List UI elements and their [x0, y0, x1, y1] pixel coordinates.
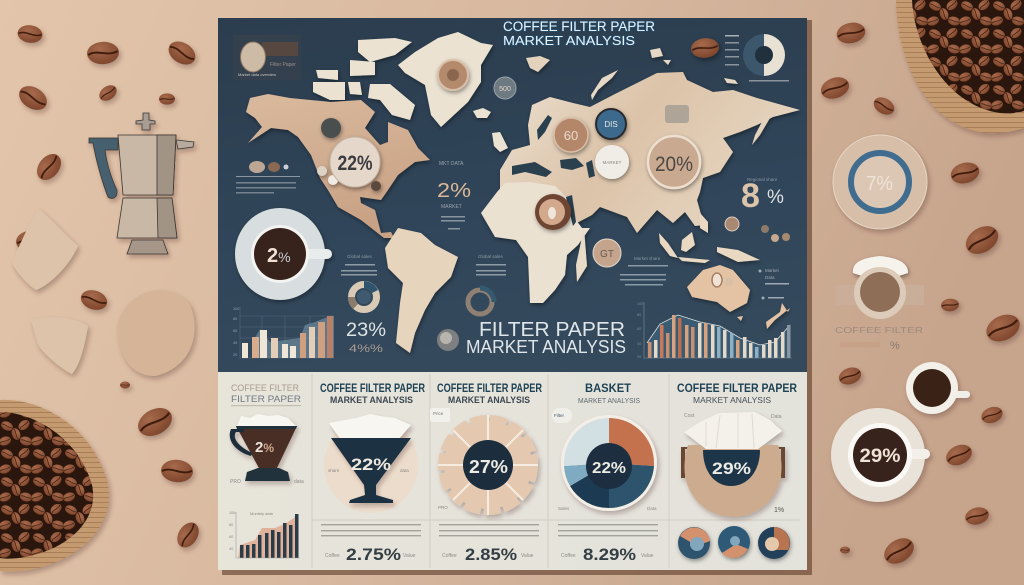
text: 29% — [860, 446, 901, 467]
bar chart: lower left — [233, 306, 334, 358]
bar chart — [229, 511, 300, 558]
Arctic islands — [313, 38, 415, 120]
indian ocean text — [620, 256, 668, 286]
column 5: coffee filter paper: Data — [771, 414, 782, 420]
marker: greenland — [438, 60, 468, 90]
marker: europe 60 — [554, 118, 588, 152]
marker: indian ocean — [593, 239, 621, 267]
panel drop shadow — [222, 20, 812, 575]
column 4: basket: MARKET ANALYSIS — [578, 396, 640, 405]
map panel — [218, 18, 807, 372]
cup with 2%: 2% — [267, 245, 291, 267]
note text: south america: Global sales — [478, 254, 504, 259]
marker: asia 20%: 20% — [655, 153, 693, 176]
column 4: basket: Filter — [554, 413, 565, 418]
column 2: coffee filter paper — [320, 381, 425, 564]
bar chart: 100 — [229, 511, 235, 515]
plate with 7% badge — [833, 135, 927, 229]
column 4: basket: 22% — [592, 460, 626, 477]
stat: 23% — [346, 320, 386, 355]
column 4: basket: Data — [647, 506, 657, 511]
paper stones left — [12, 209, 195, 376]
marker: north america 22% — [317, 118, 381, 191]
stat: 8%: 8 — [741, 177, 760, 215]
filter cup icon right — [836, 256, 924, 319]
Iceland — [473, 108, 491, 118]
right side icons and notes: Data — [765, 275, 775, 280]
note text: south america — [341, 254, 506, 276]
bar chart: lower right: 20 — [637, 355, 641, 359]
right side icons and notes: Market — [765, 268, 780, 273]
column 5: coffee filter paper: MARKET ANALYSIS — [693, 395, 771, 405]
indian ocean text: Market share — [634, 256, 661, 261]
Greenland — [398, 32, 493, 127]
column 3: coffee filter paper — [430, 381, 542, 564]
column 2: coffee filter paper: 2.75% — [346, 545, 401, 564]
stat: 2% middle: MARKET — [441, 204, 462, 210]
bar chart: Monthly data — [250, 511, 274, 516]
australia marker — [712, 273, 733, 287]
title: COFFEE FILTER PAPER — [503, 19, 655, 34]
column 3: coffee filter paper: 27% — [469, 457, 508, 477]
bar chart: lower left: 40 — [233, 341, 237, 345]
title — [503, 19, 655, 48]
marker: north america 22%: 22% — [338, 152, 373, 175]
column 1: coffee filter paper: COFFEE FILTER — [231, 383, 299, 393]
small coffee cup right — [906, 362, 970, 414]
column 1: coffee filter paper: FILTER PAPER — [231, 394, 302, 404]
column 4: basket: 8.29% — [583, 545, 636, 564]
marker: atlantic: 500 — [499, 86, 511, 93]
stat: 23%: 23% — [346, 320, 386, 341]
Red Sea — [566, 195, 576, 226]
New Zealand — [766, 303, 790, 329]
bar chart: 80 — [229, 523, 233, 527]
Indonesia and Philippines — [659, 213, 760, 263]
column 1: coffee filter paper: data — [294, 479, 304, 485]
icon: dripper with filter — [230, 414, 297, 481]
column 4: basket: Coffee — [561, 553, 576, 559]
marker: blue badge — [596, 109, 626, 139]
marker: small asia — [725, 217, 739, 231]
South America — [385, 228, 458, 353]
marker: grey square — [665, 105, 689, 123]
stat: 2% middle: MKT DATA — [439, 161, 464, 167]
stat: 8%: % — [767, 187, 784, 208]
column 3: coffee filter paper: PRO — [438, 505, 448, 510]
column 1: coffee filter paper — [229, 383, 304, 558]
Madagascar — [576, 228, 587, 282]
column 3: coffee filter paper: Value — [521, 553, 534, 559]
coffee filter caption right: COFFEE FILTER — [835, 326, 923, 335]
bar chart: lower left: 60 — [233, 329, 237, 333]
note text: south america: Global sales — [347, 254, 373, 259]
donut: top right — [725, 34, 789, 82]
icon: basket filter — [681, 412, 785, 517]
donut chart: south america — [348, 281, 378, 310]
coffee cup with 29% right — [831, 408, 930, 502]
marker: white badge: MARKET — [603, 160, 622, 165]
moka pot — [89, 113, 194, 254]
bar chart: lower left: 100 — [233, 307, 239, 311]
marker: indian ocean: GT — [600, 249, 614, 260]
title: MARKET ANALYSIS — [503, 33, 635, 48]
North America — [246, 94, 430, 238]
column 2: coffee filter paper: share — [328, 468, 340, 473]
pie chart — [561, 415, 657, 511]
marker: europe 60: 60 — [564, 128, 578, 143]
bar chart: lower right: 100 — [637, 302, 643, 306]
marker: white badge — [595, 145, 629, 179]
column 1: coffee filter paper: 2% — [255, 439, 274, 456]
marker: atlantic — [494, 77, 516, 99]
top left info card: Market data overview — [238, 72, 276, 77]
icon: dripper with filter — [329, 414, 411, 503]
donut: lower — [437, 288, 494, 351]
column 1: coffee filter paper: PRO — [230, 479, 241, 485]
top left info card — [233, 35, 301, 80]
column 5: coffee filter paper: 29% — [712, 459, 751, 478]
marker: africa — [535, 194, 571, 230]
column 3: coffee filter paper: Coffee — [442, 553, 457, 559]
inland seas — [512, 158, 595, 178]
left small stat card — [236, 161, 300, 194]
map subtitle — [466, 319, 626, 357]
bar chart: lower left: 80 — [233, 317, 237, 321]
coffee bean on map — [690, 37, 720, 59]
column 4: basket — [552, 381, 658, 564]
plate with 7% badge: 7% — [866, 173, 893, 195]
bar chart: lower left: 20 — [233, 353, 237, 357]
column 5: coffee filter paper — [677, 381, 797, 559]
column 2: coffee filter paper: 22% — [351, 455, 391, 474]
marker: blue badge: DIS — [604, 120, 618, 129]
cup with 2% — [235, 208, 332, 300]
top left info card: Filter Paper — [270, 62, 296, 68]
basket of beans bottom left — [0, 400, 109, 572]
column 2: coffee filter paper: Value — [403, 553, 416, 559]
bar chart: lower right — [637, 302, 792, 359]
bottom panel — [218, 372, 807, 570]
bar chart: lower right: 40 — [637, 342, 641, 346]
stat: 23%: 4%% — [349, 343, 383, 355]
basket of beans top right — [896, 0, 1024, 133]
stat: 2% middle: 2% — [437, 180, 471, 202]
marker: asia 20% — [648, 136, 700, 188]
coffee filter caption right: % — [890, 340, 900, 352]
map subtitle: FILTER PAPER — [479, 319, 625, 341]
column 2: coffee filter paper: data — [400, 468, 409, 473]
mini circle charts — [678, 526, 790, 559]
column 4: basket: Value — [641, 553, 654, 559]
coffee filter caption right — [835, 326, 923, 352]
column 3: coffee filter paper: Price — [433, 411, 444, 416]
column 2: coffee filter paper: Coffee — [325, 553, 340, 559]
stat: 8%: Regional share — [747, 177, 778, 182]
column 3: coffee filter paper: COFFEE FILTER PAPER — [437, 381, 542, 395]
bar chart: 40 — [229, 547, 233, 551]
column 2: coffee filter paper: MARKET ANALYSIS — [330, 395, 413, 405]
column 3: coffee filter paper: 2.85% — [465, 545, 517, 564]
icon: pleated filter — [438, 415, 538, 515]
column 2: coffee filter paper: COFFEE FILTER PAPER — [320, 381, 425, 395]
column 4: basket: BASKET — [585, 381, 632, 395]
stat: 2% middle — [437, 161, 471, 230]
Eurasia — [500, 72, 800, 233]
column 5: coffee filter paper: Cost — [684, 413, 695, 419]
Africa — [481, 182, 590, 303]
bar chart: lower right: 60 — [637, 327, 641, 331]
column 4: basket: Sales — [558, 506, 570, 511]
right side icons and notes — [758, 225, 790, 300]
column 5: coffee filter paper: COFFEE FILTER PAPER — [677, 381, 797, 395]
column 3: coffee filter paper: MARKET ANALYSIS — [448, 395, 530, 405]
column 5: coffee filter paper: 1% — [774, 507, 784, 514]
bar chart: lower right: 80 — [637, 313, 641, 317]
UK — [492, 132, 508, 152]
Japan — [752, 118, 770, 145]
Australia — [687, 265, 750, 312]
bar chart: 60 — [229, 535, 233, 539]
Svalbard — [526, 56, 550, 72]
map subtitle: MARKET ANALYSIS — [466, 337, 626, 357]
stat: 8% — [741, 177, 784, 215]
